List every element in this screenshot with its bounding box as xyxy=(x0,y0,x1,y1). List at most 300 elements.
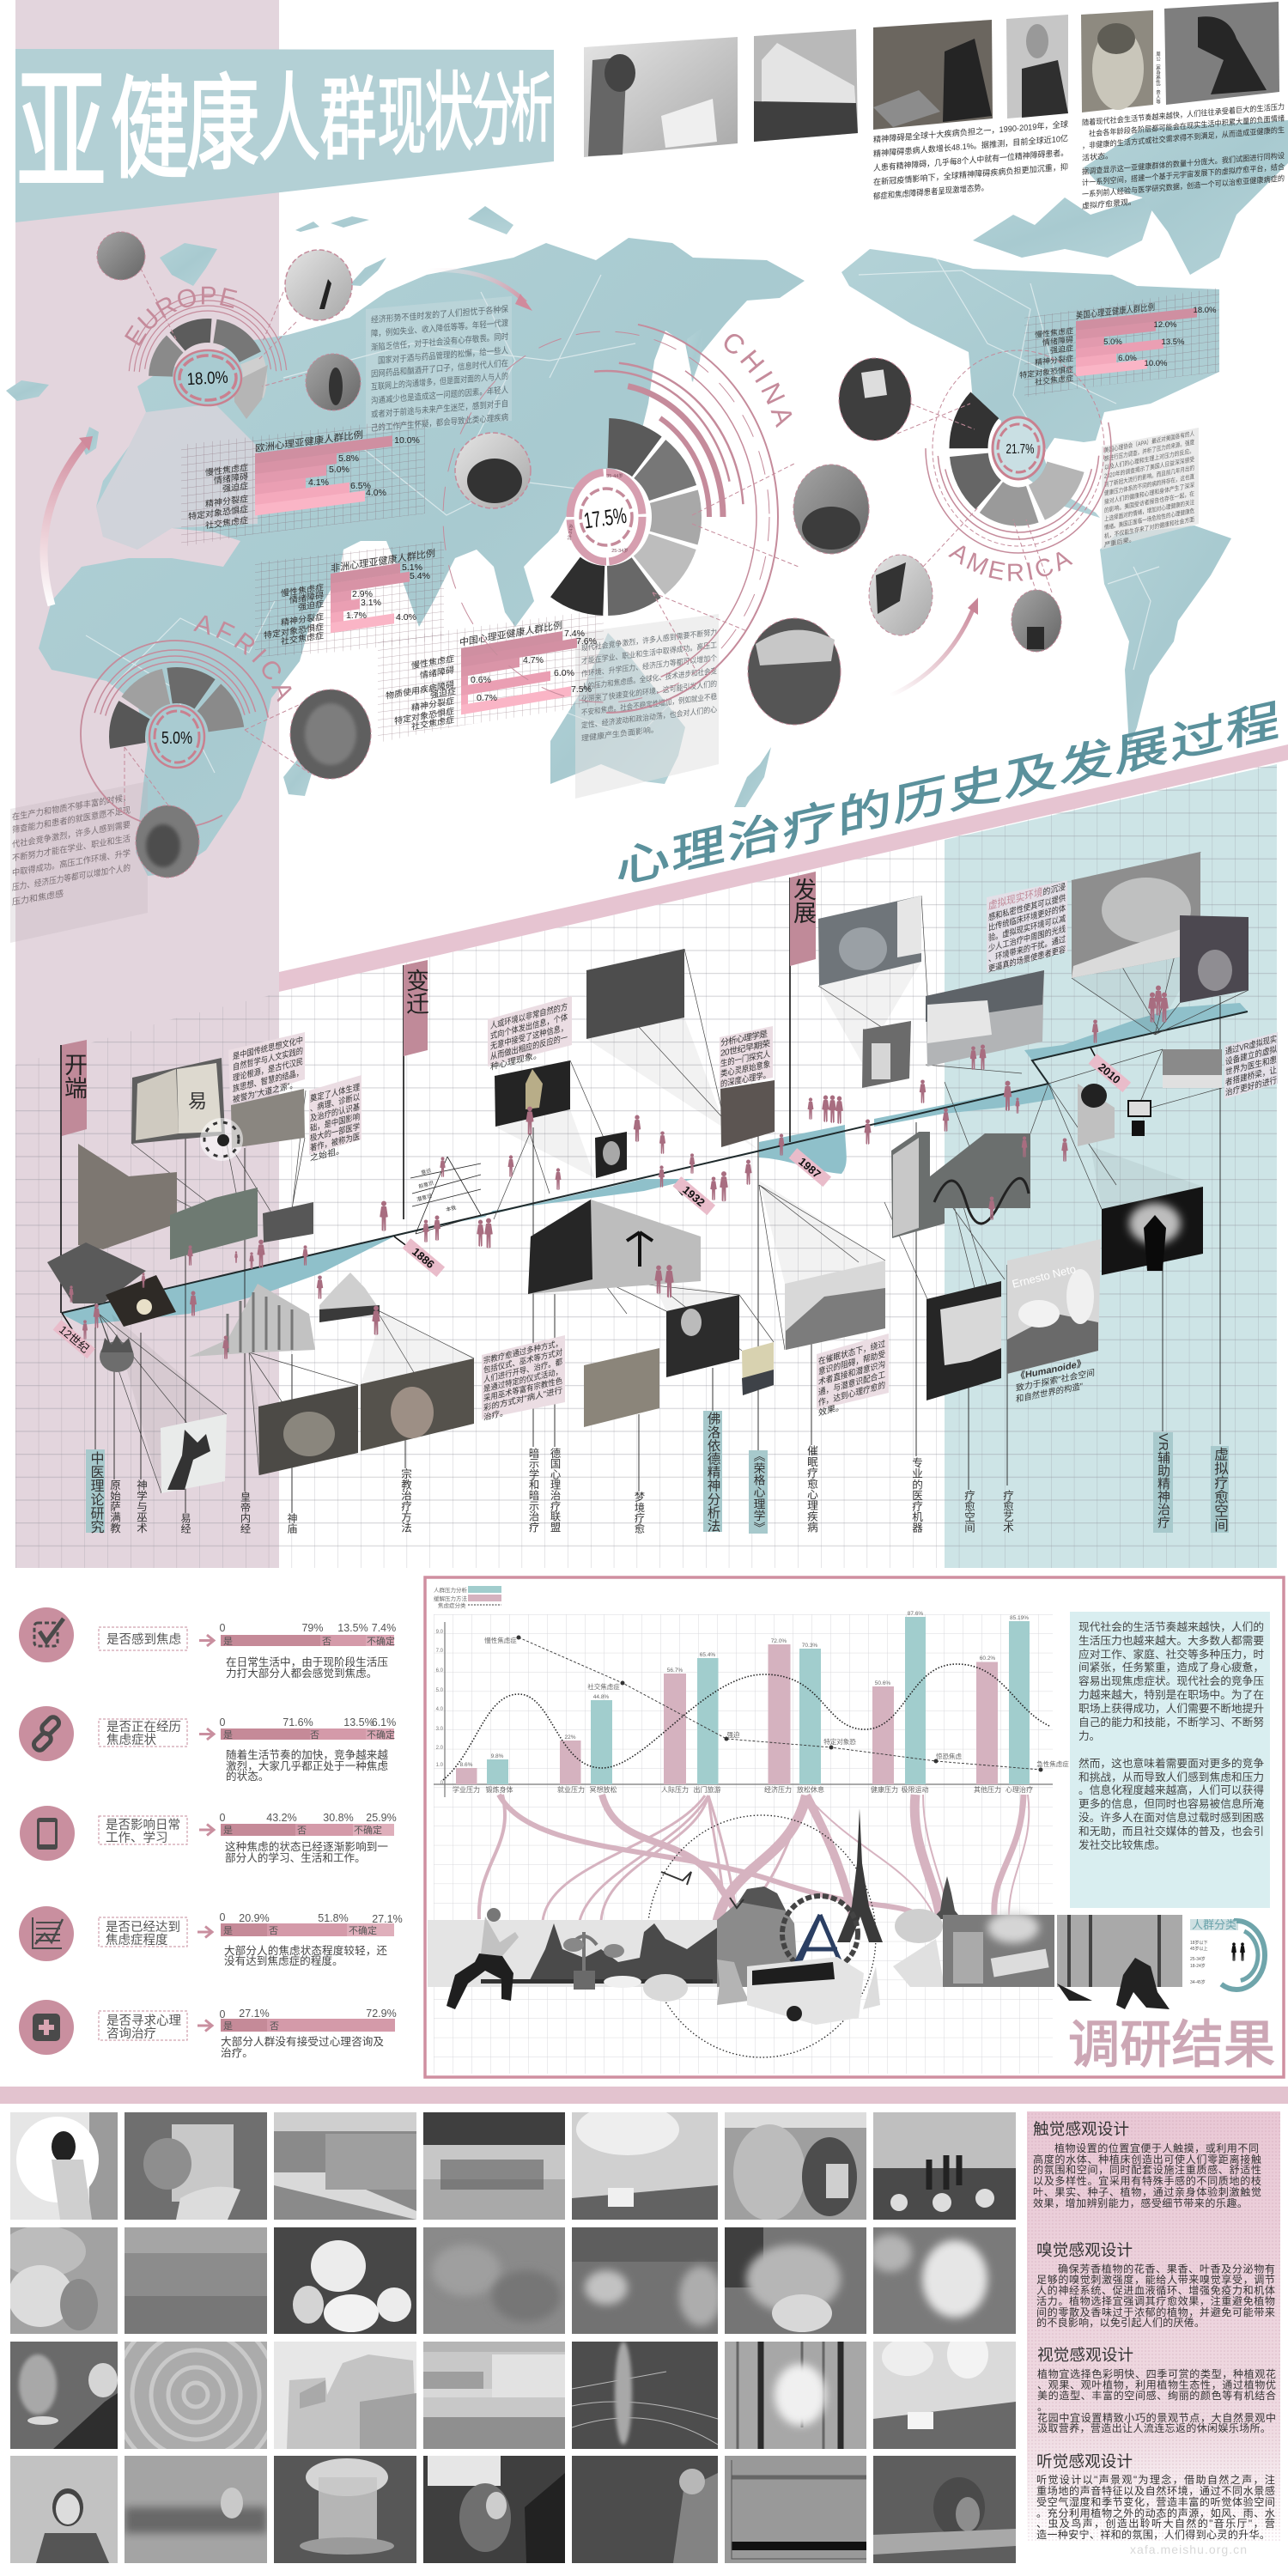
chart: Africa ratio: 社交焦虑症 xyxy=(281,629,324,647)
collage: ferris wheel xyxy=(782,1896,858,1975)
arrow xyxy=(197,1927,212,1937)
year label: 1886 xyxy=(402,1238,445,1277)
top photo: woman xyxy=(584,37,738,157)
chart: Europe ratio xyxy=(181,417,425,547)
diagram: iceberg structure xyxy=(410,1157,481,1234)
fan photos: Europe xyxy=(161,331,255,425)
region: China rings xyxy=(443,324,792,714)
text box: survey explanation: 没。许多人在面对信息过载时感到困惑 xyxy=(1078,1811,1264,1824)
bar value labels: 72.0% xyxy=(771,1638,787,1644)
chart: China ratio: 社交焦虑症 xyxy=(411,714,454,732)
title: 健 xyxy=(110,67,190,192)
label: 神学与巫术: 神学与巫术 xyxy=(135,1479,147,1534)
text block: global burden: 精神障碍是全球十大疾病负担之一，1990-2019年，全球 xyxy=(873,119,1068,145)
diagram: iceberg structure: 意识 xyxy=(420,1167,432,1176)
text card: suggestion xyxy=(488,996,572,1072)
text box: survey explanation xyxy=(1070,1612,1270,1908)
heading: CHINA: CHINA xyxy=(725,334,792,428)
question: 工作、学习 xyxy=(106,1831,168,1845)
text box: America analysis xyxy=(1102,428,1199,550)
label: 专业的医疗机器: 专业的医疗机器 xyxy=(910,1457,922,1534)
collage: city wall xyxy=(717,1886,799,1987)
bar: counselling: 否 xyxy=(270,2021,279,2032)
chart: Europe ratio: 情绪障碍 xyxy=(214,471,248,486)
section: smell: 活力。植物选择宜强调其疗愈效果，注重避免植物 xyxy=(1036,2294,1275,2307)
label: 宗教治疗方法: 宗教治疗方法 xyxy=(399,1467,411,1533)
bar: symptoms: 0 xyxy=(220,1716,226,1728)
map: New Zealand xyxy=(734,747,771,807)
arrow xyxy=(197,2020,212,2032)
label: 虚拟疗愈空间: 虚拟疗愈空间 xyxy=(1212,1447,1229,1533)
text card: suggestion: 从而做出相应的反应的一 xyxy=(490,1032,568,1062)
chart: China ratio: 7.5% xyxy=(571,684,592,695)
band: section pink stripe xyxy=(279,744,1288,992)
photo: VR woman xyxy=(1078,1084,1115,1146)
top photo: bearded sage xyxy=(1081,10,1153,112)
description xyxy=(221,2035,384,2059)
description: 随着生活节奏的加快，竞争越来越 xyxy=(226,1748,388,1761)
label: 中医理论研究: 中医理论研究 xyxy=(88,1451,105,1534)
bar: severity: 是 xyxy=(223,1925,233,1936)
heading: survey results: 调研结果 xyxy=(1068,2016,1275,2074)
vertical caption: 周公（养身养性）· 贵人等 xyxy=(1155,52,1161,104)
description xyxy=(226,1656,388,1680)
label: 疗愈空间: 疗愈空间 xyxy=(963,1490,975,1533)
survey row 4 xyxy=(19,1906,403,1967)
text card: religious therapy: 包括仪式、巫术等方式对 xyxy=(483,1347,562,1376)
section: smell xyxy=(1036,2241,1275,2329)
category labels: 学业压力 xyxy=(453,1785,480,1794)
collage: sculpted figure xyxy=(643,1974,688,2002)
description xyxy=(224,1944,387,1967)
y-axis labels: 6.0 xyxy=(436,1668,444,1674)
question: 是否已经达到 xyxy=(106,1920,180,1935)
category labels: 锻炼身体 xyxy=(486,1785,513,1794)
phase label: 开端 xyxy=(61,1040,87,1313)
text caption: Humanoide xyxy=(1016,1356,1095,1405)
chart legend: 焦虑症分类 xyxy=(438,1601,466,1609)
bar: symptoms: 6.1% xyxy=(372,1716,396,1728)
label: 德国心理治疗联盟: 德国心理治疗联盟 xyxy=(549,1447,561,1532)
anxiety type dashed line: 特定对象恐 xyxy=(823,1737,856,1746)
region: Europe rings xyxy=(125,287,287,419)
top photo: Freud xyxy=(1006,15,1068,118)
bar value labels: 8.6% xyxy=(460,1762,473,1768)
photo: old clinic xyxy=(584,1348,659,1427)
question xyxy=(99,1816,187,1845)
heading: history of psychotherapy: 心理治疗的历史及发展过程 xyxy=(617,696,1279,893)
map: Canadian Arctic islands xyxy=(973,193,1157,258)
survey row 3 xyxy=(20,1806,397,1864)
text card: analytical psychology: 分析心理学是 xyxy=(720,1028,768,1048)
text card: analytical psychology: 生的一门探究人 xyxy=(720,1048,770,1069)
chart: Europe ratio: 精神分裂症 xyxy=(205,493,248,510)
title: 现 xyxy=(378,70,426,166)
bar value labels: 44.8% xyxy=(593,1694,609,1700)
section: vision: 植物宜选择色彩明快、四季可赏的类型，种植观花 xyxy=(1037,2367,1276,2380)
year label: 12世纪: 12世纪 xyxy=(57,1323,92,1355)
chart: Africa ratio: 情绪障碍 xyxy=(289,590,324,606)
text card: suggestion: 人或环境以非常自然的方 xyxy=(490,1001,568,1031)
row 3 photos xyxy=(10,2313,1016,2476)
text block: sub-health intro: 虚拟疗愈景观。 xyxy=(1082,197,1136,210)
value: China 17.5% age ring: 25-34岁 xyxy=(611,547,629,554)
text card: analytical psychology: 的深度心理学。 xyxy=(720,1068,770,1090)
label: 梦境疗愈: 梦境疗愈 xyxy=(633,1492,645,1534)
text card: VR treatment: 治疗更好的进行 xyxy=(1225,1074,1277,1098)
photo: hypnosis therapy xyxy=(785,1261,885,1350)
title: 分 xyxy=(472,65,514,155)
callout photos: Europe xyxy=(97,232,361,410)
text card: virtual reality: 少人工治疗中周围的光线 xyxy=(988,923,1066,954)
text box: Africa analysis: 不断努力才能在学业、职业和生活 xyxy=(12,833,131,864)
section: vision: 汲取营养，营造出让人流连忘返的休闲娱乐场所。 xyxy=(1037,2421,1271,2434)
bar: anxiety: 否 xyxy=(322,1637,331,1647)
chart: China ratio: 情绪障碍 xyxy=(420,664,454,681)
panel: survey chart frame xyxy=(425,1577,1284,2077)
photo: Yijing book: 易 xyxy=(188,1091,207,1112)
category labels: 经济压力 xyxy=(764,1785,792,1794)
text box: survey explanation: 职场上获得成功，人们需要不断地提升 xyxy=(1078,1702,1264,1715)
text box: America analysis: 美国心理协会（APA）最近对美国各有的人 xyxy=(1104,429,1194,454)
text box: America analysis: 的影响。美国受访者报告也存在一起，在 xyxy=(1104,489,1194,514)
icon: medical plus xyxy=(19,2000,74,2055)
section: vision: 美的造型、丰富的空间感、绚丽的颜色等有机结合 xyxy=(1037,2389,1276,2402)
chart: crowd classification: 25-34岁 xyxy=(1190,1956,1206,1962)
arrow xyxy=(199,1635,214,1646)
text card: suggestion: 式向个体发出信息，个体 xyxy=(490,1012,568,1042)
photo: bubble pod xyxy=(1072,852,1200,978)
text box: survey explanation: 容易出现焦虑症状。现代社会的竞争压 xyxy=(1078,1674,1264,1687)
collage: runner xyxy=(447,1908,519,2009)
question: 咨询治疗 xyxy=(106,2026,156,2041)
section: touch: 效果，增加辨别能力，感受细节带来的乐趣。 xyxy=(1033,2196,1248,2209)
photo: Neto artwork: Ernesto Neto xyxy=(1011,1262,1077,1291)
section: touch: 触觉感观设计 xyxy=(1033,2120,1129,2138)
teal bars xyxy=(487,1617,1030,1784)
question xyxy=(99,2011,187,2041)
text card: VR treatment: 者搭建桥梁，让 xyxy=(1225,1064,1277,1088)
text card: religious therapy: 宗教疗愈通过多种方式， xyxy=(483,1338,562,1366)
bar: symptoms: 13.5% xyxy=(343,1716,374,1728)
collage: white dogs xyxy=(604,1976,641,1988)
chart: Africa ratio: 1.7% xyxy=(346,611,367,621)
collage: white structure xyxy=(893,1939,945,1987)
photo: Wundt statue scene xyxy=(586,949,684,1039)
text box: China analysis: 现代社会竞争激烈，许多人感到需要不断努力 xyxy=(581,627,717,653)
year label: 1932: 1932 xyxy=(680,1183,708,1209)
chart title: China: 中国心理亚健康人群比例 xyxy=(459,619,562,648)
photo: sci-fi medical xyxy=(818,896,921,986)
value: China 17.5% age ring: 17.5% xyxy=(582,502,629,533)
text box: Africa analysis: 压力和焦虑感 xyxy=(12,888,64,908)
chart: Europe ratio: 5.8% xyxy=(338,453,359,464)
section: hearing: 受空气湿度和季节变化，营造丰富的听觉体验空间 xyxy=(1036,2495,1275,2508)
chart title: Europe: 欧洲心理亚健康人群比例 xyxy=(255,428,363,454)
bar: daily impact: 0 xyxy=(220,1812,226,1824)
collage: forest photo xyxy=(943,1912,1054,1987)
label: 神庙: 神庙 xyxy=(286,1513,298,1534)
chart legend: 人群压力分析 xyxy=(434,1586,467,1594)
chart: Africa ratio: 特定对象恐惧症 xyxy=(264,621,324,641)
y-axis labels: 7.0 xyxy=(436,1649,444,1654)
text card: hypnosis: 通，与潜意识配合工 xyxy=(818,1369,885,1398)
bar chart: stress and relief xyxy=(434,1611,1069,1797)
survey row 2 xyxy=(19,1706,396,1783)
text card: Neijing: 著作，被称为医 xyxy=(310,1131,360,1153)
dotted curve xyxy=(443,1664,1049,1780)
year label: 2010 xyxy=(1088,1054,1131,1092)
bar: counselling: 是 xyxy=(223,2020,233,2032)
question xyxy=(99,1719,187,1747)
text box: Africa analysis: 中取得成功。高压工作环境、升学 xyxy=(12,848,131,878)
callout photos: China xyxy=(455,433,869,725)
region: America rings xyxy=(925,350,1112,581)
bar: counselling: 27.1% xyxy=(239,2008,270,2020)
section: smell: 人的神经系统、促进血液循环、增强免疫力和机体 xyxy=(1036,2284,1275,2296)
anxiety type dashed line: 强迫 xyxy=(726,1730,740,1739)
category labels: 出门旅游 xyxy=(694,1785,721,1794)
bar value labels: 87.6% xyxy=(908,1611,923,1617)
map overlay: faded Europe xyxy=(96,404,258,550)
text box: America analysis: 严重后果。 xyxy=(1104,535,1135,549)
photo: arrow man xyxy=(495,1060,570,1127)
text box: survey explanation: 自己的能力和技能，不断学习、不断努 xyxy=(1078,1716,1264,1728)
bar value labels: 60.2% xyxy=(980,1656,995,1662)
question: 是否正在经历 xyxy=(106,1720,181,1735)
photo: machine xyxy=(862,1021,911,1088)
bar: daily impact: 25.9% xyxy=(366,1812,397,1824)
text card: Chinese tradition: 理论根源，是古代汉民 xyxy=(233,1055,303,1084)
category labels xyxy=(453,1785,1033,1794)
bar value labels: 65.4% xyxy=(700,1652,715,1658)
chart: Africa ratio: 4.0% xyxy=(396,612,416,623)
text card: analytical psychology: 类心灵原始意象 xyxy=(720,1058,770,1079)
map: Australia xyxy=(550,633,685,784)
description: 在日常生活中，由于现阶段生活压 xyxy=(226,1656,388,1668)
text box: America analysis: 情绪。美国正面临一场危险性的心理健康危 xyxy=(1104,507,1194,532)
phase label: 开端: 开端 xyxy=(61,1053,87,1099)
text caption: Humanoide: 《Humanoide》 xyxy=(1016,1358,1086,1382)
text box: China analysis: 才能在学业、职业和生活中取得成功。高压工 xyxy=(581,640,717,665)
photo: modern building xyxy=(891,1132,1030,1238)
section: vision xyxy=(1037,2346,1276,2434)
chart title: America: 美国心理亚健康人群比例 xyxy=(1076,301,1155,321)
question: 是否感到焦虑 xyxy=(106,1632,181,1647)
text card: virtual reality: 、环境带来的干扰。通过 xyxy=(988,933,1066,964)
icon: line chart xyxy=(19,1906,74,1961)
chart: America ratio: 18.0% xyxy=(1194,306,1217,315)
bar value labels: 85.19% xyxy=(1010,1615,1029,1621)
text card: religious therapy: 治疗。 xyxy=(483,1407,507,1423)
chart: Europe ratio: 5.0% xyxy=(329,465,349,475)
text block: global burden: 精神障碍患病人数增长48.1%。据推测，目前全球近10亿 xyxy=(873,133,1068,159)
text card: hypnosis: 在催眠状态下，绕过 xyxy=(818,1338,885,1367)
year label: 1932 xyxy=(672,1176,715,1215)
question xyxy=(99,1917,187,1947)
world map xyxy=(6,120,1288,876)
text box: Europe analysis xyxy=(366,296,512,434)
chart: America ratio: 13.5% xyxy=(1162,337,1185,347)
bar: symptoms xyxy=(220,1716,396,1741)
text card: Neijing: 础，是中国影响 xyxy=(310,1111,360,1133)
chart: China ratio: 0.6% xyxy=(471,675,491,685)
photo: Freud portrait xyxy=(666,1295,739,1377)
text card: VR treatment: 通过VR虚拟现实 xyxy=(1225,1033,1277,1057)
text card: religious therapy xyxy=(482,1335,565,1423)
photo: School of Athens xyxy=(258,1385,358,1475)
text box: America analysis: 以及人们的心理和生理上对压力的反应。 xyxy=(1104,447,1194,471)
icon: chain link xyxy=(19,1706,74,1761)
label: 疗愈艺术: 疗愈艺术 xyxy=(1001,1490,1013,1533)
map: Madagascar xyxy=(283,756,316,796)
axes xyxy=(434,1622,1053,1797)
label: 易经: 易经 xyxy=(179,1513,191,1534)
question xyxy=(99,1627,187,1650)
chart: Europe ratio: 慢性焦虑症 xyxy=(205,462,248,478)
label: 荣格心理学 xyxy=(749,1450,768,1534)
text box: survey explanation: 更多的信息，但同时也容易被信息所淹 xyxy=(1078,1797,1264,1810)
year label: 1987: 1987 xyxy=(796,1155,823,1181)
text box: China analysis: 不安和焦虑。社会不稳定性增加，例如就业不稳 xyxy=(581,691,717,717)
y-axis labels: 3.0 xyxy=(436,1727,444,1732)
description: 大部分人的焦虑状态程度较轻，还 xyxy=(224,1944,387,1957)
section: hearing xyxy=(1036,2452,1275,2541)
text card: suggestion: 种心理现象。 xyxy=(490,1048,542,1072)
bar: symptoms: 是 xyxy=(223,1729,233,1741)
text card: religious therapy: 彩的方式对"病人"进行 xyxy=(483,1385,562,1413)
fan photos: Africa xyxy=(127,685,227,788)
description xyxy=(226,1748,388,1783)
bar: anxiety: 7.4% xyxy=(372,1622,396,1634)
chart: crowd classification: 45岁以上 xyxy=(1190,1946,1208,1952)
anxiety type dashed line xyxy=(484,1635,1069,1772)
section: smell: 间的零散及香味过于浓郁的植物，并避免可能带来 xyxy=(1036,2306,1275,2318)
title: 析 xyxy=(511,68,553,152)
chart legend: 缓解压力方法 xyxy=(434,1595,467,1602)
bar: daily impact: 是 xyxy=(223,1825,233,1836)
photo: Raphael painting xyxy=(361,1358,474,1451)
text card: Neijing xyxy=(309,1075,361,1163)
arrow: to America xyxy=(890,598,978,696)
chart: America ratio: 10.0% xyxy=(1145,359,1168,368)
text box: China analysis xyxy=(575,614,719,799)
chart: America ratio: 情绪障碍 xyxy=(1042,334,1073,347)
bar: anxiety: 不确定 xyxy=(367,1635,395,1647)
arrow xyxy=(199,1824,214,1836)
chart: Europe ratio: 特定对象恐惧症 xyxy=(188,503,248,522)
collage: birds xyxy=(661,1872,744,1908)
text card: virtual reality: 比传统临床环境更好的体 xyxy=(988,902,1066,933)
dotted big circle xyxy=(647,1815,876,2057)
chart: crowd classification: 人群分类 xyxy=(1192,1918,1236,1931)
band: divider xyxy=(0,2087,1288,2104)
text card: VR treatment: 世界为医生和患 xyxy=(1225,1054,1277,1078)
text box: China analysis: 化带来了快速变化的环境，这可能引发人们的 xyxy=(581,678,717,704)
chart: crowd classification xyxy=(1190,1918,1265,1990)
category labels: 放松休息 xyxy=(797,1785,824,1794)
text box: Africa analysis: 筛查能力和患者的就医意愿不足现 xyxy=(12,805,131,835)
chart: China ratio: 慢性焦虑症 xyxy=(411,653,454,671)
photo: silhouette in light xyxy=(1102,1187,1203,1275)
collage: Big Wild Goose pagoda xyxy=(932,1876,962,1919)
chart: China ratio: 精神分裂症 xyxy=(411,695,454,714)
chart: America ratio: 社交焦虑症 xyxy=(1035,373,1073,386)
text card: Chinese tradition xyxy=(228,1032,305,1105)
value: Africa 5.0% xyxy=(149,706,204,768)
anxiety type dashed line: 社交焦虑症 xyxy=(587,1682,620,1691)
section: touch: 的氛围和空间，同时配套设施注重质感、舒适性 xyxy=(1033,2163,1261,2176)
title: 群 xyxy=(320,70,376,171)
chart: Africa ratio: 3.1% xyxy=(361,598,381,608)
collage: woods and skier xyxy=(1057,1915,1182,2009)
text caption: Humanoide: 致力于探索"社会空间 xyxy=(1016,1367,1095,1394)
chart: Africa ratio xyxy=(255,541,444,657)
text card: virtual reality: 验。虚拟现实环境可以减 xyxy=(988,913,1066,944)
icon: bagua xyxy=(200,1118,243,1161)
value: China 17.5% age ring: 35-44岁 xyxy=(606,472,623,479)
chart: Africa ratio: 2.9% xyxy=(352,589,373,599)
bar: severity: 20.9% xyxy=(239,1912,270,1924)
text box: survey explanation: 和挑战，从而导致人们感到焦虑和压力 xyxy=(1078,1771,1264,1783)
photo: shaman ritual xyxy=(106,1275,176,1327)
text box: survey explanation: 生活压力也越来越大。大多数人都需要 xyxy=(1078,1635,1264,1647)
chart: Europe ratio: 强迫症 xyxy=(222,480,248,495)
text card: Neijing: 奠定了人体生理 xyxy=(310,1081,360,1104)
collage: castle and skyline xyxy=(481,1923,717,1984)
map: UK xyxy=(82,427,99,455)
chart: America ratio: 精神分裂症 xyxy=(1035,353,1073,367)
text card: religious therapy: 人们进行开导、治疗。都 xyxy=(483,1357,562,1385)
bar: counselling xyxy=(220,2008,397,2032)
text box: survey explanation: 然而，这也意味着需要面对更多的竞争 xyxy=(1078,1757,1264,1770)
text box: survey explanation: 现代社会的生活节奏越来越快，人们的 xyxy=(1078,1620,1264,1633)
text caption: Humanoide: 和自然世界的构造" xyxy=(1016,1380,1083,1405)
pink bars xyxy=(456,1644,998,1784)
collage: round building xyxy=(895,1909,943,1943)
text block: global burden: 在新冠疫情影响下，全球精神障碍疾病负担更加沉重，抑 xyxy=(873,161,1068,187)
chart: China ratio: 7.6% xyxy=(576,636,597,647)
fan photos: America xyxy=(969,390,1068,507)
bar value labels: 70.3% xyxy=(802,1643,817,1649)
text card: Chinese tradition: 被誉为"大道之源"。 xyxy=(233,1078,297,1105)
text card: Chinese tradition: 族思想、智慧的结晶， xyxy=(233,1066,303,1094)
bar value labels: 9.8% xyxy=(491,1753,504,1759)
chart: China ratio: 6.0% xyxy=(554,668,574,678)
text card: virtual reality: 感和私密性使其可以提供 xyxy=(988,892,1066,923)
vertical labels xyxy=(86,1411,1229,1534)
text box: America analysis: 群进行压力调查，并析了压力的来源。强度 xyxy=(1104,438,1194,463)
chart: China ratio: 4.7% xyxy=(523,655,544,665)
section: touch xyxy=(1033,2120,1261,2209)
text card: hypnosis: 作，达到心理疗愈的 xyxy=(818,1379,885,1408)
arrow xyxy=(199,1728,214,1740)
text box: Europe analysis: 国家对于酒与药品管理的松懈，给一些人 xyxy=(378,344,508,366)
photo: Reichstag xyxy=(926,970,1044,1066)
bar: symptoms: 不确定 xyxy=(367,1728,395,1741)
text card: Neijing: 极大的一部医学 xyxy=(310,1121,360,1144)
row 4 photos xyxy=(10,2456,1016,2563)
bar value labels xyxy=(460,1611,1029,1768)
value: Africa 5.0%: 5.0% xyxy=(161,729,192,748)
photo: Huangdi Neijing pages xyxy=(231,1089,305,1148)
bar: anxiety: 0 xyxy=(220,1622,226,1634)
label: 皇帝内经: 皇帝内经 xyxy=(239,1492,251,1534)
category labels: 冥想放松 xyxy=(589,1785,617,1794)
chart: America ratio: 6.0% xyxy=(1118,354,1137,363)
text card: suggestion: 无意中接受了这种信息， xyxy=(490,1022,568,1052)
y-axis labels xyxy=(436,1630,444,1786)
